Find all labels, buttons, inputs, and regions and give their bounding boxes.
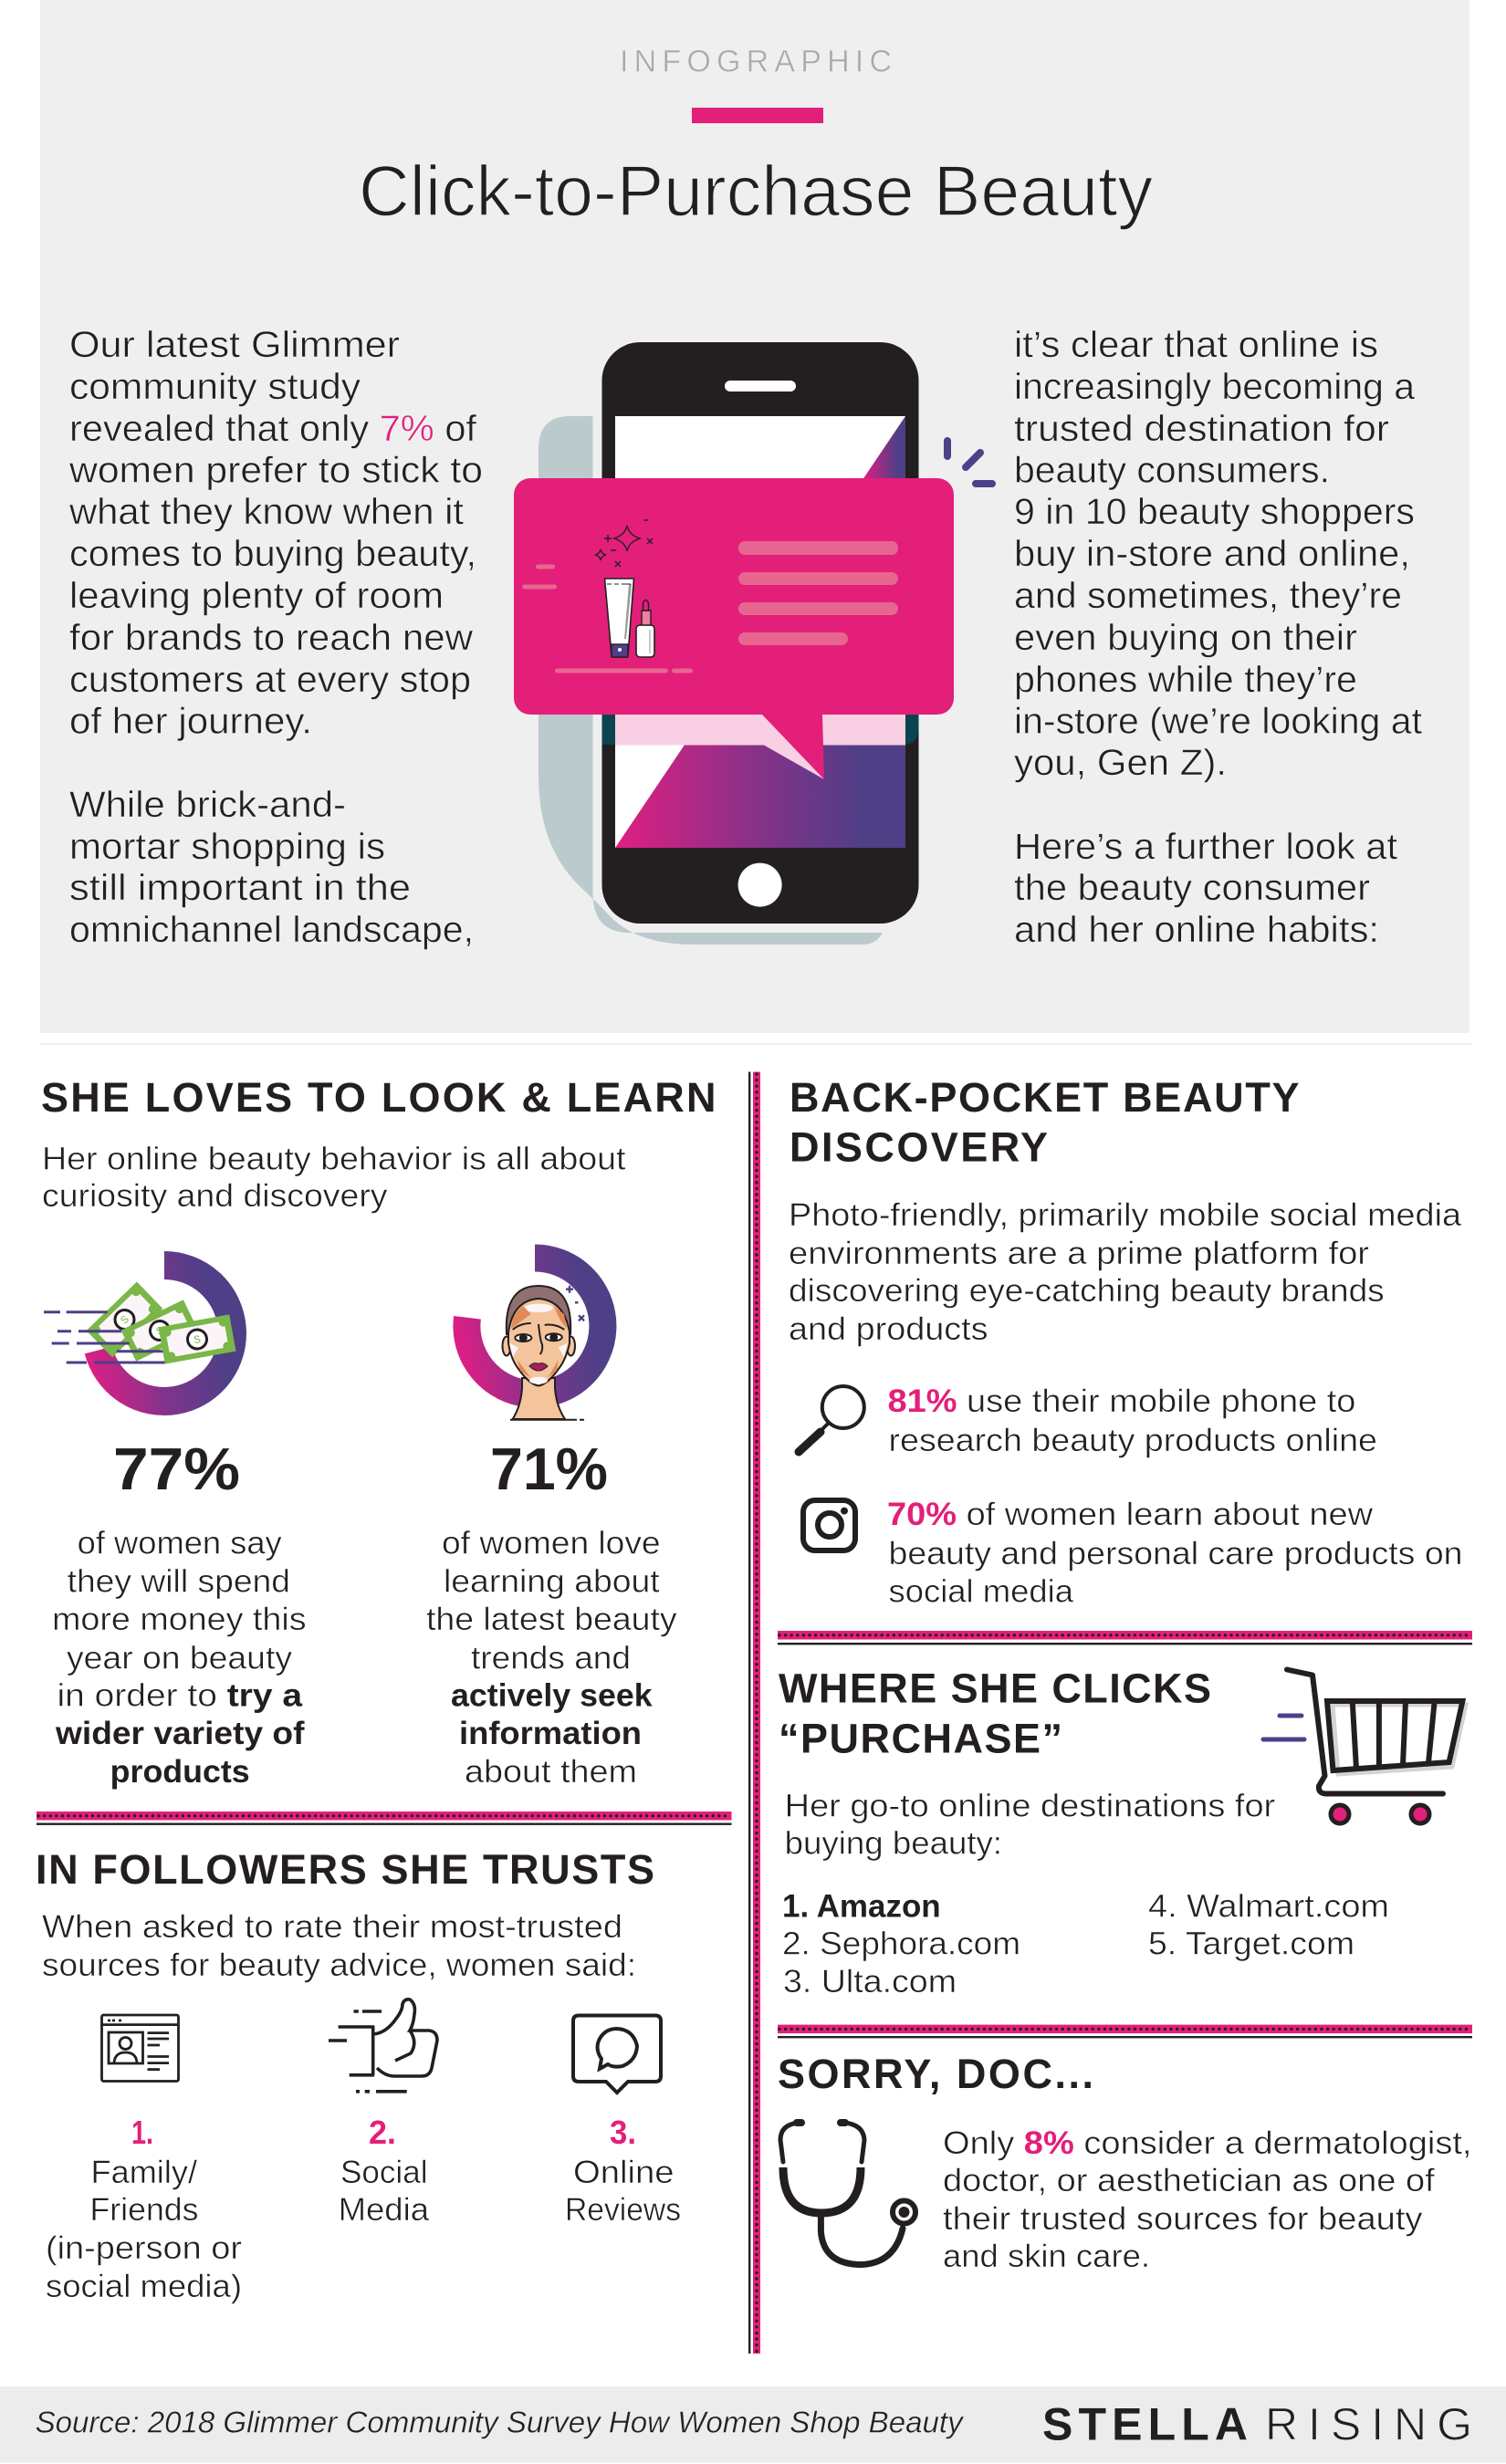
source note: Source: 2018 Glimmer Community Survey How Women Shop Beauty [36, 2406, 965, 2438]
text block: 71% description: learning about [444, 1564, 660, 1599]
divider: right section 1 [778, 1631, 1472, 1644]
icon: thumbs up [329, 1999, 437, 2092]
bubble text lines [522, 541, 898, 673]
text block: intro right: you, Gen Z). [1014, 743, 1227, 783]
text block: 71% description [426, 1525, 677, 1790]
text block: 8% stat: doctor, or aesthetician as one of [943, 2163, 1435, 2198]
intro text: Photo-friendly, primarily mobile social media [789, 1197, 1462, 1233]
stat: 70%: beauty and personal care products on [889, 1536, 1462, 1571]
intro text: discovering eye-catching beauty brands [789, 1273, 1385, 1309]
title: Click-to-Purchase Beauty [359, 151, 1153, 231]
text block: 71% description: trends and [471, 1640, 631, 1676]
text block: intro left: revealed that only 7% of [69, 409, 477, 449]
illustration: phone with speech bubble [514, 342, 992, 945]
text block: 77% description: year on beauty [67, 1640, 293, 1676]
text block: 8% stat [943, 2125, 1471, 2274]
text block: 71% description: actively seek [451, 1678, 653, 1714]
text block: 8% stat: Only 8% consider a dermatologist, [943, 2125, 1471, 2161]
text block: intro right: 9 in 10 beauty shoppers [1014, 492, 1415, 532]
phone speaker [725, 381, 796, 392]
text block: intro right: and her online habits: [1014, 910, 1379, 950]
hairline divider [40, 1043, 1471, 1045]
list: destinations 4-5: 5. Target.com [1148, 1926, 1354, 1962]
intro text: curiosity and discovery [42, 1178, 388, 1214]
text block: intro right: buy in-store and online, [1014, 534, 1410, 574]
text block: intro left: comes to buying beauty, [69, 534, 476, 574]
text block: intro right: and sometimes, they’re [1014, 576, 1402, 616]
text block: intro left: community study [69, 367, 361, 407]
pink accent bar [692, 108, 823, 123]
heading: BACK-POCKET BEAUTY [790, 1074, 1300, 1121]
heading: IN FOLLOWERS SHE TRUSTS [36, 1846, 654, 1893]
list: destinations 1-3: 2. Sephora.com [782, 1926, 1020, 1962]
stat: 81% [887, 1383, 1377, 1458]
list: rank 1: (in-person or [46, 2230, 242, 2266]
text block: 71% description: information [459, 1716, 642, 1751]
stat: 70%: 70% of women learn about new [887, 1497, 1374, 1532]
donut chart: 77% [99, 1265, 232, 1401]
text block: intro left: women prefer to stick to [68, 451, 483, 491]
footer bar [0, 2386, 1506, 2463]
bill 1: $ [118, 1312, 132, 1327]
stat: 71%: 71% [490, 1436, 608, 1502]
list: rank 1: Friends [89, 2192, 199, 2228]
text block: intro left: While brick-and- [69, 785, 346, 825]
phone body [602, 342, 918, 924]
text block: intro left: still important in the [69, 868, 411, 908]
intro text [785, 1789, 1276, 1862]
face shape [508, 1299, 570, 1385]
panel: she loves to look and learn [41, 1074, 716, 1790]
text block: 71% description: of women love [442, 1525, 661, 1561]
vertical divider [748, 1071, 760, 2354]
heading: SORRY, DOC... [778, 2051, 1093, 2097]
text block: intro left: Our latest Glimmer [69, 325, 400, 365]
logo: Stella Rising: STELLA [1042, 2398, 1248, 2449]
intro text: buying beauty: [785, 1826, 1002, 1862]
icon: cosmetics tube and bottle [604, 579, 654, 657]
heading: “PURCHASE” [779, 1716, 1062, 1762]
list: rank 2: Media [339, 2192, 430, 2228]
list: destinations 1-3: 1. Amazon [782, 1889, 941, 1925]
text block: intro right: beauty consumers. [1014, 451, 1330, 491]
intro text: sources for beauty advice, women said: [42, 1947, 636, 1983]
text block: 77% description: of women say [78, 1525, 282, 1561]
speed lines [44, 1312, 166, 1363]
phone shadow [539, 416, 883, 945]
contour highlights [524, 1304, 553, 1312]
lips [529, 1363, 548, 1371]
list: rank 3 [565, 2114, 681, 2228]
text block: intro left [68, 325, 483, 950]
panel: in followers she trusts [36, 1846, 681, 2304]
stat: 77%: 77% [113, 1436, 240, 1502]
text block: 71% description: the latest beauty [426, 1602, 677, 1637]
icon: sparkles [595, 520, 653, 567]
text block: intro right: even buying on their [1014, 618, 1357, 658]
intro text: Her online beauty behavior is all about [42, 1141, 626, 1177]
bill 3: $ [193, 1331, 203, 1347]
intro text [789, 1197, 1462, 1347]
text block: intro right: Here’s a further look at [1014, 827, 1397, 867]
text block: intro left: mortar shopping is [69, 827, 385, 867]
list: destinations 4-5 [1148, 1889, 1389, 1962]
text block: intro right: phones while they’re [1014, 660, 1357, 700]
heading: SHE LOVES TO LOOK & LEARN [41, 1074, 716, 1121]
heading [779, 1665, 1211, 1762]
text block: intro right: increasingly becoming a [1014, 367, 1416, 407]
icon: woman's face with contouring [502, 1286, 584, 1420]
speech bubble [514, 478, 954, 779]
text block: intro left: for brands to reach new [69, 618, 473, 658]
brows and nose [513, 1323, 564, 1354]
intro text [42, 1141, 626, 1214]
heading: WHERE SHE CLICKS [779, 1665, 1211, 1712]
list: rank 3: 3. [610, 2114, 636, 2151]
list: rank 2: 2. [369, 2114, 396, 2151]
text block: intro left: what they know when it [68, 492, 464, 532]
stat: 81%: 81% use their mobile phone to [887, 1383, 1355, 1419]
text block: intro right [1014, 325, 1422, 950]
stat: 70%: social media [889, 1573, 1074, 1610]
text block: intro right: the beauty consumer [1014, 868, 1370, 908]
divider: left section [37, 1811, 732, 1825]
text block: 77% description: wider variety of [55, 1716, 305, 1751]
intro text: and products [789, 1311, 988, 1347]
intro text: Her go-to online destinations for [785, 1789, 1276, 1824]
list: rank 1: 1. [131, 2114, 153, 2151]
pale pink strip [615, 715, 905, 745]
eyebrow label: INFOGRAPHIC [620, 44, 892, 78]
motion ticks [947, 441, 992, 484]
panel: where she clicks purchase [779, 1665, 1466, 1999]
phone screen [615, 416, 905, 848]
heading [790, 1074, 1300, 1171]
panel: sorry doc [778, 2051, 1471, 2274]
list: destinations 1-3: 3. Ulta.com [783, 1964, 957, 1999]
list: rank 1 [46, 2114, 242, 2304]
text block: 8% stat: their trusted sources for beauty [943, 2201, 1423, 2237]
icon: stethoscope [780, 2123, 915, 2265]
list: rank 2 [339, 2114, 430, 2228]
logo: Stella Rising [1042, 2398, 1472, 2449]
text block: intro left: customers at every stop [69, 660, 471, 700]
list: destinations 4-5: 4. Walmart.com [1148, 1889, 1389, 1925]
panel: header [40, 0, 1469, 1033]
ears [502, 1336, 511, 1356]
list: rank 1: social media) [46, 2269, 242, 2304]
text block: 8% stat: and skin care. [943, 2239, 1150, 2274]
intro text [42, 1909, 636, 1983]
bill 1 [87, 1282, 162, 1357]
teal band behind bubble [602, 715, 918, 745]
list: rank 3: Online [573, 2155, 674, 2190]
neck [513, 1378, 565, 1419]
icon: magnifying glass [799, 1386, 864, 1452]
stat: 81%: research beauty products online [889, 1423, 1377, 1458]
text block: 77% description: in order to try a [57, 1678, 303, 1714]
text block: intro left: omnichannel landscape, [69, 910, 474, 950]
list: rank 2: Social [340, 2155, 427, 2190]
icon: shopping cart [1263, 1670, 1466, 1823]
donut chart: 71% [466, 1258, 602, 1394]
stat: 70% [887, 1497, 1462, 1610]
text block: 71% description: about them [465, 1754, 637, 1790]
text block: intro left: leaving plenty of room [69, 576, 444, 616]
text block: 77% description: more money this [52, 1602, 307, 1637]
home button [738, 863, 782, 907]
text block: 77% description: products [110, 1754, 250, 1790]
heading: DISCOVERY [790, 1124, 1048, 1171]
logo: Stella Rising: RISING [1265, 2398, 1472, 2449]
icon: flying money [44, 1282, 236, 1364]
bill 3 [158, 1314, 236, 1364]
text block: 77% description: they will spend [68, 1564, 290, 1599]
icon: browser profile [102, 2015, 179, 2081]
intro text: When asked to rate their most-trusted [42, 1909, 622, 1945]
bill 2 [121, 1300, 198, 1362]
marks around face [566, 1286, 584, 1321]
panel: back-pocket beauty discovery [789, 1074, 1462, 1610]
list: rank 1: Family/ [91, 2155, 197, 2190]
bill 2: $ [153, 1322, 166, 1338]
divider: right section 2 [778, 2025, 1472, 2038]
text block: intro right: trusted destination for [1014, 409, 1389, 449]
icon: chat review [573, 2015, 661, 2093]
intro text: environments are a prime platform for [789, 1236, 1369, 1271]
text block: intro right: it’s clear that online is [1014, 325, 1378, 365]
list: destinations 1-3 [782, 1889, 1020, 1999]
icon: instagram [803, 1500, 855, 1550]
text block: intro left: of her journey. [69, 701, 312, 741]
eyes [515, 1334, 531, 1342]
list: rank 3: Reviews [565, 2192, 681, 2228]
hair [507, 1286, 570, 1334]
text block: 77% description [52, 1525, 307, 1790]
text block: intro right: in-store (we’re looking at [1014, 701, 1422, 741]
